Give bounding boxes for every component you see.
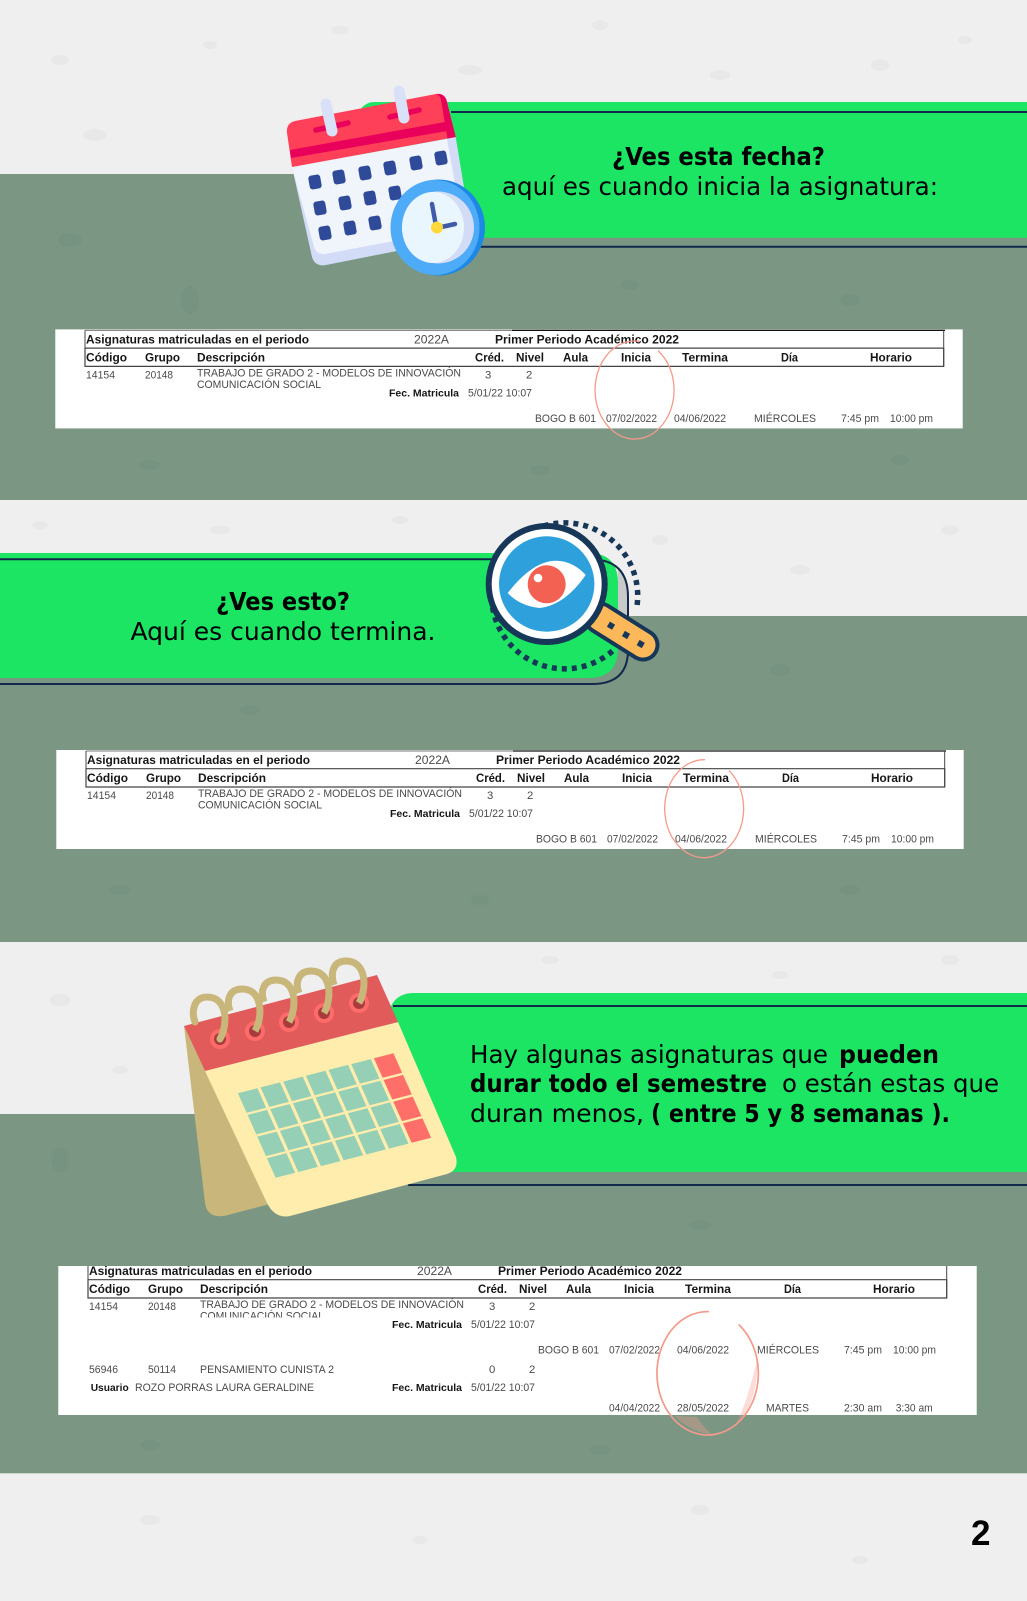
table: enrolled subjects with short and long courses: Primer Periodo Académico 2022 <box>498 1265 683 1278</box>
table: enrolled subjects highlighting start date: Código <box>86 351 127 364</box>
table: enrolled subjects with short and long courses: 14154 <box>89 1301 118 1313</box>
table: enrolled subjects highlighting start date: MIÉRCOLES <box>754 412 816 425</box>
table: enrolled subjects with short and long courses: Usuario <box>91 1382 129 1394</box>
table: enrolled subjects with short and long courses: MARTES <box>766 1403 809 1415</box>
table: enrolled subjects with short and long courses: PENSAMIENTO CUNISTA 2 <box>200 1364 334 1376</box>
text: duration of subjects: duran menos, <box>470 1099 644 1128</box>
table: enrolled subjects with short and long courses: 2 <box>529 1301 535 1313</box>
heading: ves esta fecha: ¿Ves esta fecha? <box>612 142 825 171</box>
text: duration of subjects: pueden <box>839 1040 939 1069</box>
table: enrolled subjects highlighting start date: BOGO B 601 <box>535 413 596 425</box>
table: enrolled subjects highlighting end date: 07/02/2022 <box>607 834 658 846</box>
background band 2 <box>0 616 1027 942</box>
table: enrolled subjects with short and long courses: Inicia <box>624 1283 654 1296</box>
text: aqui es cuando termina: Aquí es cuando termina. <box>130 617 436 646</box>
icon: magnifying glass with eye <box>489 523 645 669</box>
table: enrolled subjects highlighting end date: Código <box>87 772 128 785</box>
table: enrolled subjects highlighting start date: Termina <box>682 351 729 364</box>
table: enrolled subjects highlighting start date: 3 <box>485 369 491 381</box>
text: duration of subjects: durar todo el semestre <box>470 1069 767 1098</box>
table: enrolled subjects with short and long courses: Aula <box>566 1283 591 1296</box>
table: enrolled subjects highlighting end date: COMUNICACIÓN SOCIAL <box>198 799 322 812</box>
text: duration of subjects: o están estas que <box>782 1069 999 1098</box>
table: enrolled subjects with short and long courses: 07/02/2022 <box>609 1345 660 1357</box>
page number: 2 <box>971 1514 990 1553</box>
table: enrolled subjects highlighting start date: 04/06/2022 <box>674 413 726 425</box>
table: enrolled subjects with short and long courses: 7:45 pm <box>844 1345 882 1357</box>
table: enrolled subjects highlighting end date: Nivel <box>517 772 545 785</box>
table: enrolled subjects with short and long courses: Créd. <box>478 1283 507 1296</box>
table: enrolled subjects highlighting start date: Primer Periodo Académico 2022 <box>495 333 680 346</box>
table: enrolled subjects highlighting start date: Asignaturas matriculadas en el periodo <box>86 333 309 346</box>
table: enrolled subjects with short and long courses: Fec. Matricula <box>392 1382 462 1394</box>
table: enrolled subjects with short and long courses: Día <box>784 1283 801 1296</box>
table: enrolled subjects with short and long courses: Código <box>89 1283 130 1296</box>
table: enrolled subjects highlighting end date: 2022A <box>415 753 450 767</box>
table: enrolled subjects with short and long courses: 2022A <box>417 1264 452 1278</box>
table: enrolled subjects highlighting start date: Grupo <box>145 351 180 364</box>
table: enrolled subjects with short and long courses: 04/06/2022 <box>677 1345 729 1357</box>
callout: circle on end dates <box>657 1312 758 1435</box>
table: enrolled subjects with short and long courses: Termina <box>685 1283 732 1296</box>
table: enrolled subjects highlighting end date: Aula <box>564 772 589 785</box>
table: enrolled subjects with short and long courses: 04/04/2022 <box>609 1403 660 1415</box>
table: enrolled subjects with short and long courses: COMUNICACIÓN SOCIAL <box>200 1310 324 1323</box>
table: enrolled subjects with short and long courses: 5/01/22 10:07 <box>471 1319 535 1331</box>
table: enrolled subjects highlighting start date: Día <box>781 351 798 364</box>
table: enrolled subjects highlighting end date: 14154 <box>87 790 116 802</box>
table: enrolled subjects with short and long courses: 3:30 am <box>896 1403 933 1415</box>
table: enrolled subjects with short and long courses: ROZO PORRAS LAURA GERALDINE <box>135 1382 314 1394</box>
table: enrolled subjects with short and long courses: MIÉRCOLES <box>757 1344 819 1357</box>
table: enrolled subjects with short and long courses: BOGO B 601 <box>538 1345 599 1357</box>
table: enrolled subjects with short and long courses: Asignaturas matriculadas en el periodo <box>89 1265 312 1278</box>
table: enrolled subjects highlighting end date: Créd. <box>476 772 505 785</box>
table: enrolled subjects highlighting start date: COMUNICACIÓN SOCIAL <box>197 378 321 391</box>
table: enrolled subjects highlighting end date: MIÉRCOLES <box>755 833 817 846</box>
table: enrolled subjects highlighting end date: Día <box>782 772 799 785</box>
table: enrolled subjects highlighting end date: 04/06/2022 <box>675 834 727 846</box>
panel: green banner semester duration <box>388 993 1027 1185</box>
icon: spiral desk calendar <box>184 961 457 1216</box>
table: enrolled subjects highlighting start date: Inicia <box>621 351 651 364</box>
table: enrolled subjects highlighting end date <box>56 750 964 849</box>
table: enrolled subjects with short and long courses: 2:30 am <box>844 1403 882 1415</box>
table: enrolled subjects highlighting end date: 7:45 pm <box>842 834 880 846</box>
table: enrolled subjects highlighting start date: 7:45 pm <box>841 413 879 425</box>
text: duration of subjects: ( entre 5 y 8 semanas ). <box>651 1099 950 1128</box>
table: enrolled subjects with short and long courses: Nivel <box>519 1283 547 1296</box>
table: enrolled subjects highlighting end date: Horario <box>871 772 913 785</box>
text: duration of subjects <box>470 1040 999 1128</box>
table: enrolled subjects highlighting start date: 20148 <box>145 369 173 381</box>
callout: circle on start date <box>595 341 674 439</box>
heading: ves esto: ¿Ves esto? <box>216 587 350 616</box>
table: enrolled subjects highlighting end date: Fec. Matricula <box>390 808 460 820</box>
table: enrolled subjects with short and long courses: 5/01/22 10:07 <box>471 1382 535 1394</box>
table: enrolled subjects with short and long courses: Horario <box>873 1283 915 1296</box>
table: enrolled subjects with short and long courses: 3 <box>489 1301 495 1313</box>
table: enrolled subjects highlighting end date: Termina <box>683 772 730 785</box>
text: inicia la asignatura: aquí es cuando inicia la asignatura: <box>502 172 938 201</box>
table: enrolled subjects highlighting start date <box>55 329 963 428</box>
table: enrolled subjects highlighting start date: Descripción <box>197 351 265 364</box>
table: enrolled subjects with short and long courses: 20148 <box>148 1301 176 1313</box>
table: enrolled subjects highlighting start date: Horario <box>870 351 912 364</box>
table: enrolled subjects with short and long courses: 56946 <box>89 1364 118 1376</box>
table: enrolled subjects with short and long courses: 50114 <box>148 1364 176 1376</box>
table: enrolled subjects with short and long courses: Descripción <box>200 1283 268 1296</box>
table: enrolled subjects highlighting start date: 07/02/2022 <box>606 413 657 425</box>
table: enrolled subjects with short and long courses: Fec. Matricula <box>392 1319 462 1331</box>
table: enrolled subjects with short and long courses: 10:00 pm <box>893 1345 936 1357</box>
table: enrolled subjects with short and long courses: 0 <box>489 1364 495 1376</box>
icon: desk calendar with clock <box>287 91 485 276</box>
table: enrolled subjects highlighting end date: 5/01/22 10:07 <box>469 808 533 820</box>
table: enrolled subjects highlighting end date: Descripción <box>198 772 266 785</box>
table: enrolled subjects highlighting start date: 10:00 pm <box>890 413 933 425</box>
background band 1 <box>0 174 1027 500</box>
table: enrolled subjects highlighting end date: Primer Periodo Académico 2022 <box>496 754 681 767</box>
table: enrolled subjects with short and long courses: 28/05/2022 <box>677 1403 729 1415</box>
table: enrolled subjects highlighting start date: Aula <box>563 351 588 364</box>
text: duration of subjects: Hay algunas asignaturas que <box>470 1040 828 1069</box>
table: enrolled subjects highlighting end date: Asignaturas matriculadas en el periodo <box>87 754 310 767</box>
background band 3 <box>0 1114 1027 1473</box>
panel: green banner end date <box>0 553 628 684</box>
table: enrolled subjects highlighting end date: Inicia <box>622 772 652 785</box>
table: enrolled subjects highlighting end date: TRABAJO DE GRADO 2 - MODELOS DE INNOVACIÓN <box>198 787 462 800</box>
callout: circle on end date <box>665 760 744 858</box>
table: enrolled subjects highlighting end date: 3 <box>487 790 493 802</box>
table: enrolled subjects highlighting start date: Créd. <box>475 351 504 364</box>
table: enrolled subjects highlighting end date: 10:00 pm <box>891 834 934 846</box>
table: enrolled subjects highlighting start date: 5/01/22 10:07 <box>468 387 532 399</box>
table: enrolled subjects highlighting start date: Fec. Matricula <box>389 387 459 399</box>
table: enrolled subjects with short and long courses: Grupo <box>148 1283 183 1296</box>
table: enrolled subjects highlighting start date: 14154 <box>86 369 115 381</box>
table: enrolled subjects highlighting start date: 2022A <box>414 332 449 346</box>
table: enrolled subjects highlighting start date: Nivel <box>516 351 544 364</box>
table: enrolled subjects with short and long courses: TRABAJO DE GRADO 2 - MODELOS DE INNOVACIÓN <box>200 1298 464 1311</box>
table: enrolled subjects with short and long courses: 2 <box>529 1364 535 1376</box>
table: enrolled subjects highlighting start date: 2 <box>526 369 532 381</box>
table: enrolled subjects highlighting end date: 2 <box>527 790 533 802</box>
panel: green banner start date <box>358 102 1027 247</box>
table: enrolled subjects highlighting end date: 20148 <box>146 790 174 802</box>
table: enrolled subjects highlighting end date: BOGO B 601 <box>536 834 597 846</box>
table: enrolled subjects with short and long courses <box>58 1264 977 1415</box>
table: enrolled subjects highlighting start date: TRABAJO DE GRADO 2 - MODELOS DE INNOVACIÓN <box>197 366 461 379</box>
table: enrolled subjects highlighting end date: Grupo <box>146 772 181 785</box>
